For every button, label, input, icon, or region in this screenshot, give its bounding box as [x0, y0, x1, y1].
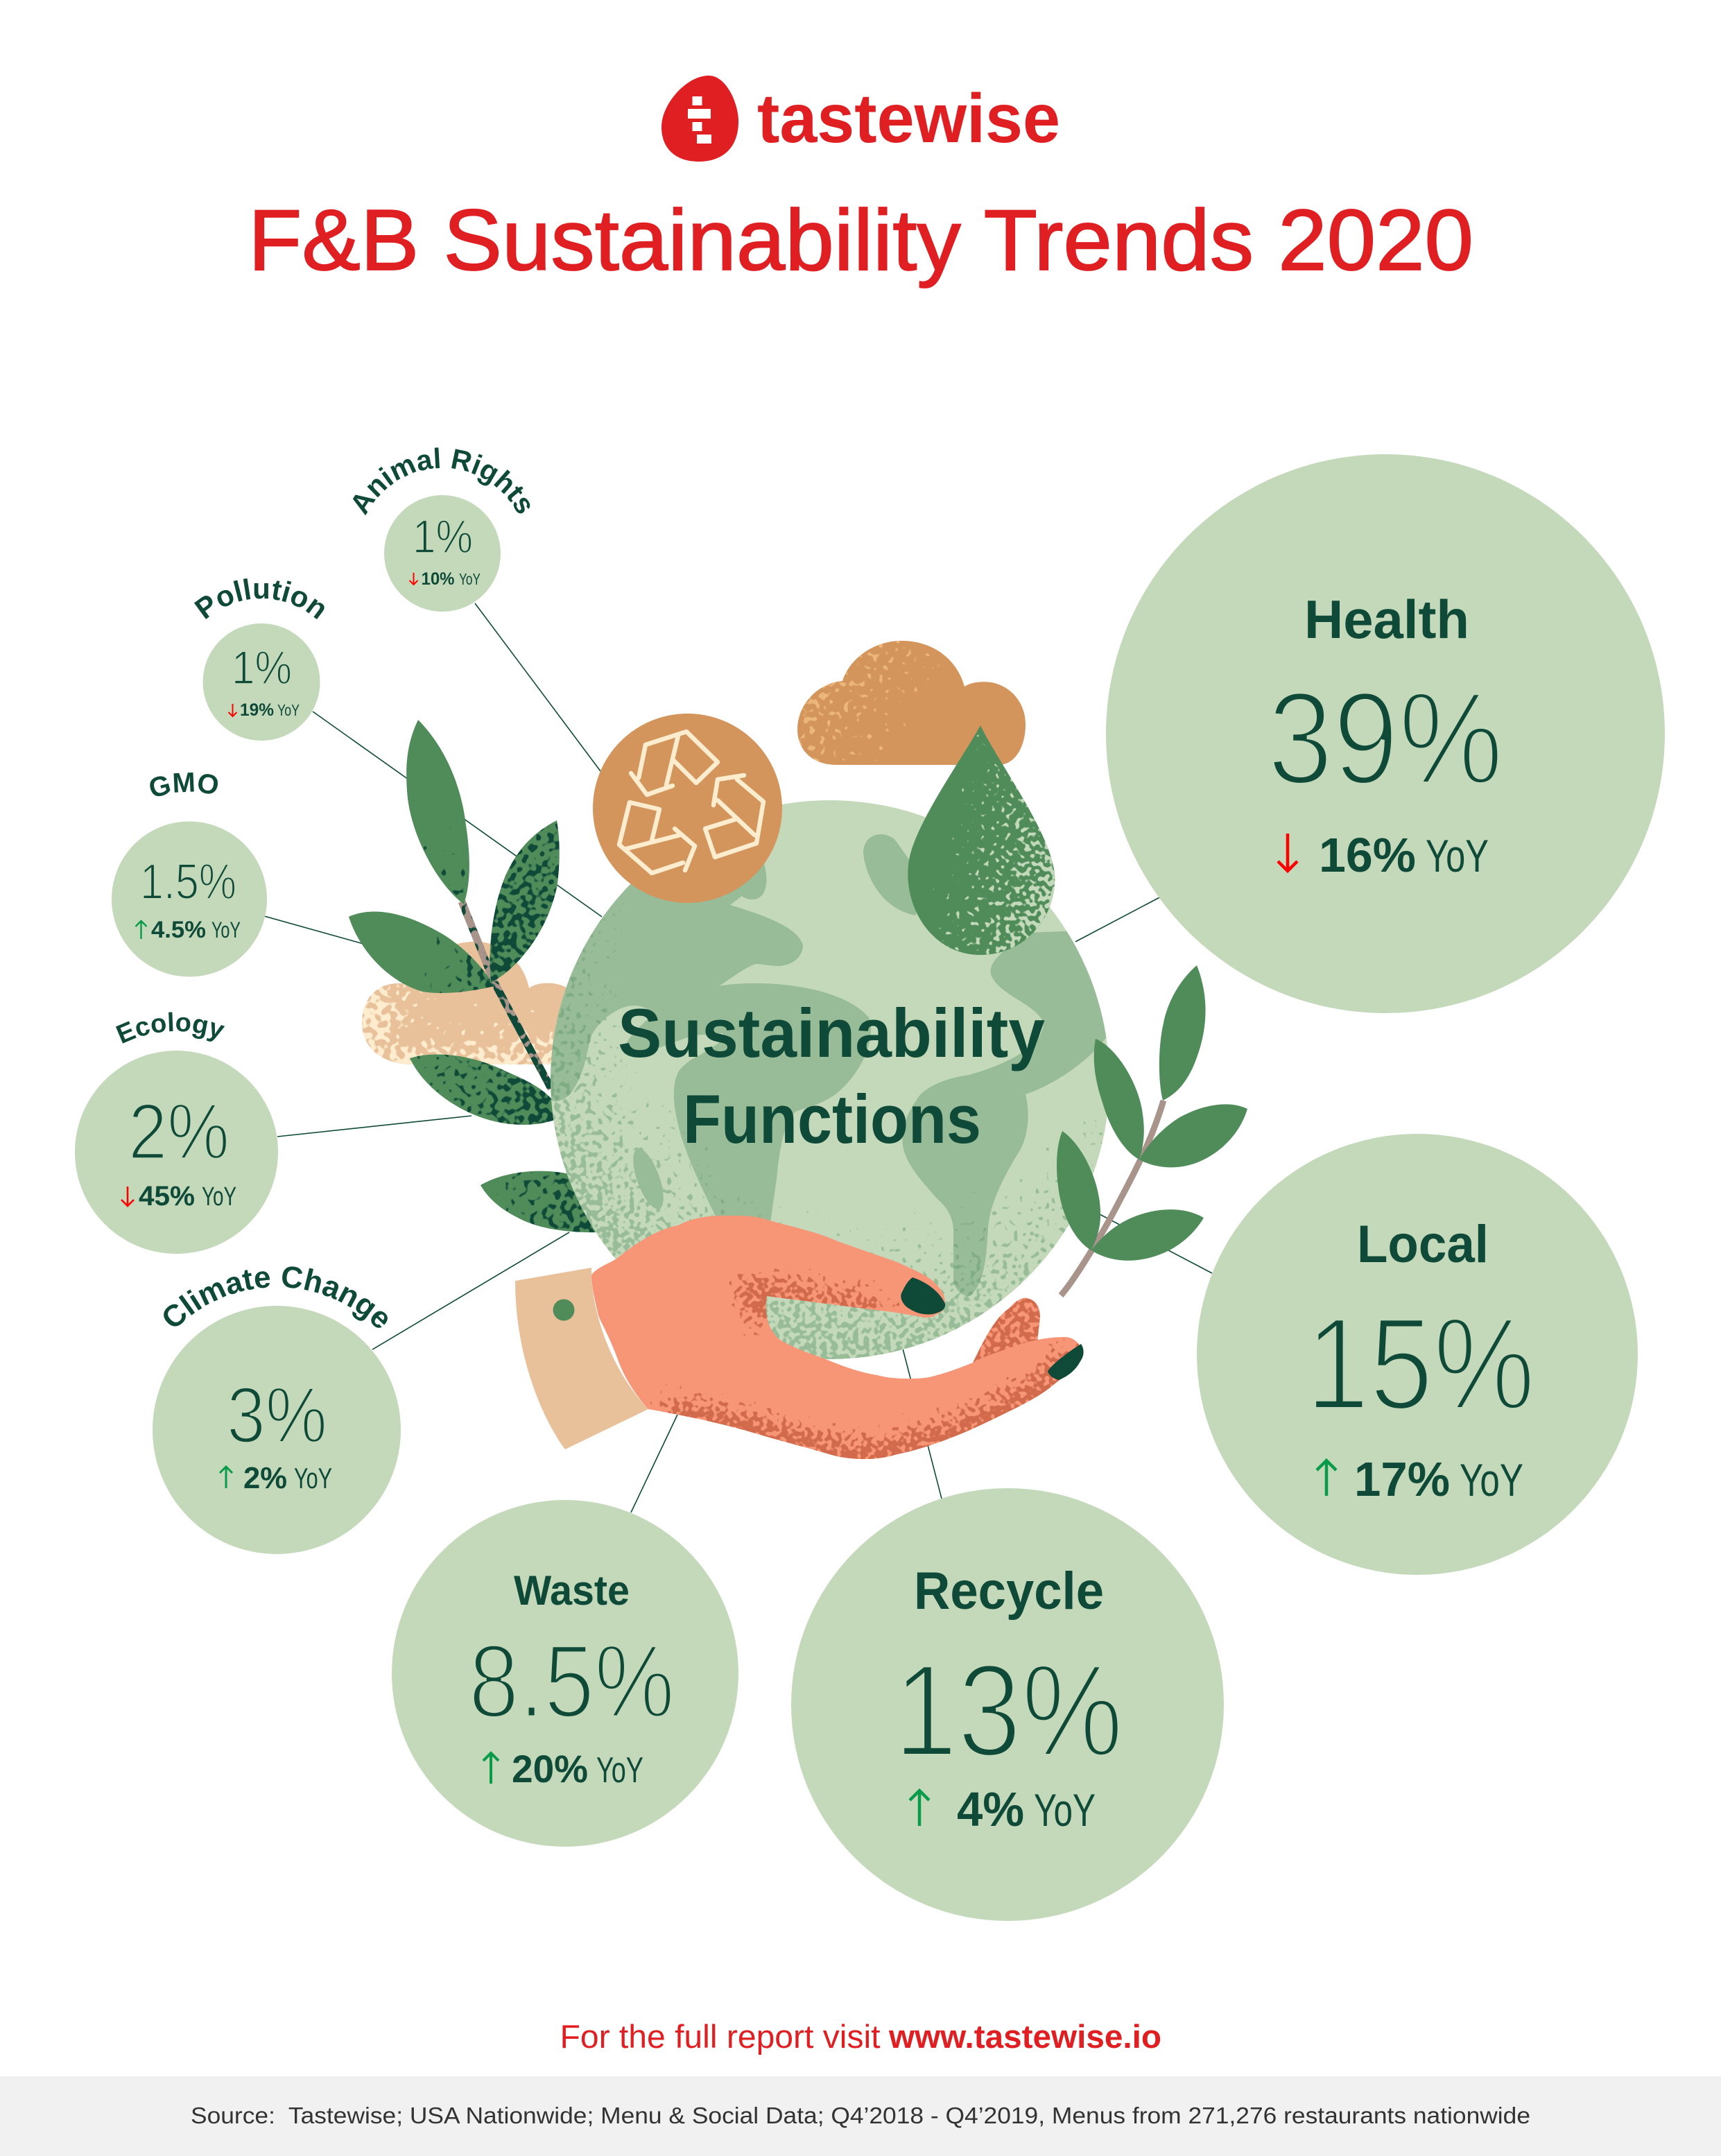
trend arrow: [1317, 1460, 1336, 1496]
trend unit: YoY: [1460, 1454, 1523, 1506]
curved label: Pollution: [194, 578, 325, 619]
peach cloud: [362, 942, 569, 1064]
center heading: Functions: [683, 1080, 981, 1157]
right branch stem: [1061, 1101, 1164, 1295]
trend value: 10%: [422, 569, 455, 589]
left leaf: lower middle: [410, 1054, 555, 1125]
orange cloud: [797, 641, 1026, 765]
trend value: 16%: [1319, 828, 1416, 882]
trend arrow: [136, 921, 147, 939]
trend unit: YoY: [294, 1462, 332, 1494]
trend arrow: [483, 1753, 499, 1784]
left branch stem: [462, 902, 551, 1089]
continent shading stipple: [551, 903, 987, 1296]
trend arrow: [229, 704, 237, 716]
leader lines: [264, 603, 1212, 1512]
cuff: [515, 1268, 648, 1449]
fingernail: index: [901, 1277, 945, 1314]
left leaf: middle: [349, 911, 494, 993]
panel: gmo: [112, 773, 267, 976]
trend unit: YoY: [1426, 830, 1489, 881]
trend arrow: [121, 1187, 134, 1206]
palm and fingers: [591, 1216, 1081, 1459]
label: Local: [1357, 1215, 1489, 1274]
title: F&B Sustainability Trends 2020: [248, 193, 1473, 288]
value: 3%: [227, 1372, 327, 1460]
left leaf: top: [406, 720, 469, 904]
left leaf: upper right: [490, 820, 560, 983]
cuff button: [553, 1300, 574, 1320]
trend unit: YoY: [1034, 1784, 1096, 1836]
recycle badge: [593, 714, 782, 903]
curved label: Animal Rights: [352, 447, 530, 516]
trend arrow: [220, 1467, 232, 1488]
value: 8.5%: [469, 1623, 675, 1739]
source text: Source: Tastewise; USA Nationwide; Menu & Social Data; Q4’2018 - Q4’2019, Menus from 271,276 restaurants nationwide: [191, 2103, 1530, 2128]
trend unit: YoY: [277, 701, 300, 719]
trend unit: YoY: [202, 1182, 236, 1211]
trend value: 4%: [957, 1782, 1024, 1836]
footer call to action: For the full report visit: [560, 2018, 881, 2055]
panel: waste: [392, 1500, 738, 1847]
panel: health: [1106, 454, 1665, 1013]
logo wordmark: tastewise: [757, 80, 1060, 157]
hand: [515, 1216, 1085, 1463]
hand shading stipple: [648, 1288, 1085, 1463]
trend value: 45%: [139, 1181, 195, 1211]
trend unit: YoY: [211, 917, 241, 942]
logo: tastewise: [661, 76, 1060, 162]
label: Waste: [514, 1567, 630, 1614]
value: 13%: [894, 1637, 1123, 1784]
panel: ecology: [75, 1012, 278, 1254]
trend value: 4.5%: [151, 917, 206, 943]
trend arrow: [1278, 834, 1297, 871]
panel: pollution: [194, 578, 325, 741]
curved label: Climate Change: [164, 1266, 388, 1328]
label: Recycle: [914, 1562, 1104, 1621]
value: 2%: [128, 1088, 230, 1176]
right branch: [1057, 965, 1247, 1295]
trend value: 17%: [1354, 1452, 1450, 1506]
trend arrow: [409, 573, 417, 585]
icon: logo egg: [661, 76, 738, 162]
panel: climate change: [153, 1266, 401, 1554]
center heading: [618, 994, 1045, 1157]
left leaf: bottom: [481, 1171, 603, 1232]
panel: local: [1197, 1134, 1638, 1575]
label: Health: [1304, 589, 1469, 650]
trend value: 20%: [512, 1747, 588, 1791]
value: 15%: [1306, 1291, 1535, 1438]
trend value: 19%: [240, 700, 274, 720]
value: 39%: [1268, 665, 1503, 812]
globe disc: [551, 800, 1109, 1359]
value: 1%: [232, 641, 292, 694]
footer call to action: www.tastewise.io: [888, 2018, 1161, 2055]
globe: [541, 800, 1123, 1359]
center heading: Sustainability: [618, 994, 1045, 1071]
central illustration: [349, 641, 1247, 1463]
continents: [541, 832, 1123, 1296]
footer call to action: [560, 2018, 1161, 2055]
panel: recycle: [791, 1488, 1224, 1921]
water drop: [908, 725, 1055, 955]
right leaves: [1057, 965, 1247, 1261]
value: 1%: [413, 510, 473, 563]
value: 1.5%: [140, 854, 236, 910]
source band: [0, 2076, 1721, 2156]
panel: animal rights: [352, 447, 530, 612]
trend value: 2%: [243, 1461, 287, 1495]
trend unit: YoY: [459, 570, 481, 588]
trend unit: YoY: [596, 1750, 643, 1791]
globe shading stipple: [551, 800, 1109, 1359]
thumb: [973, 1298, 1040, 1363]
curved label: Ecology: [116, 1012, 225, 1044]
curved label: GMO: [150, 773, 218, 796]
icon: recycle arrows: [619, 732, 763, 873]
fingernail: thumb: [1048, 1344, 1084, 1380]
trend arrow: [910, 1791, 929, 1826]
